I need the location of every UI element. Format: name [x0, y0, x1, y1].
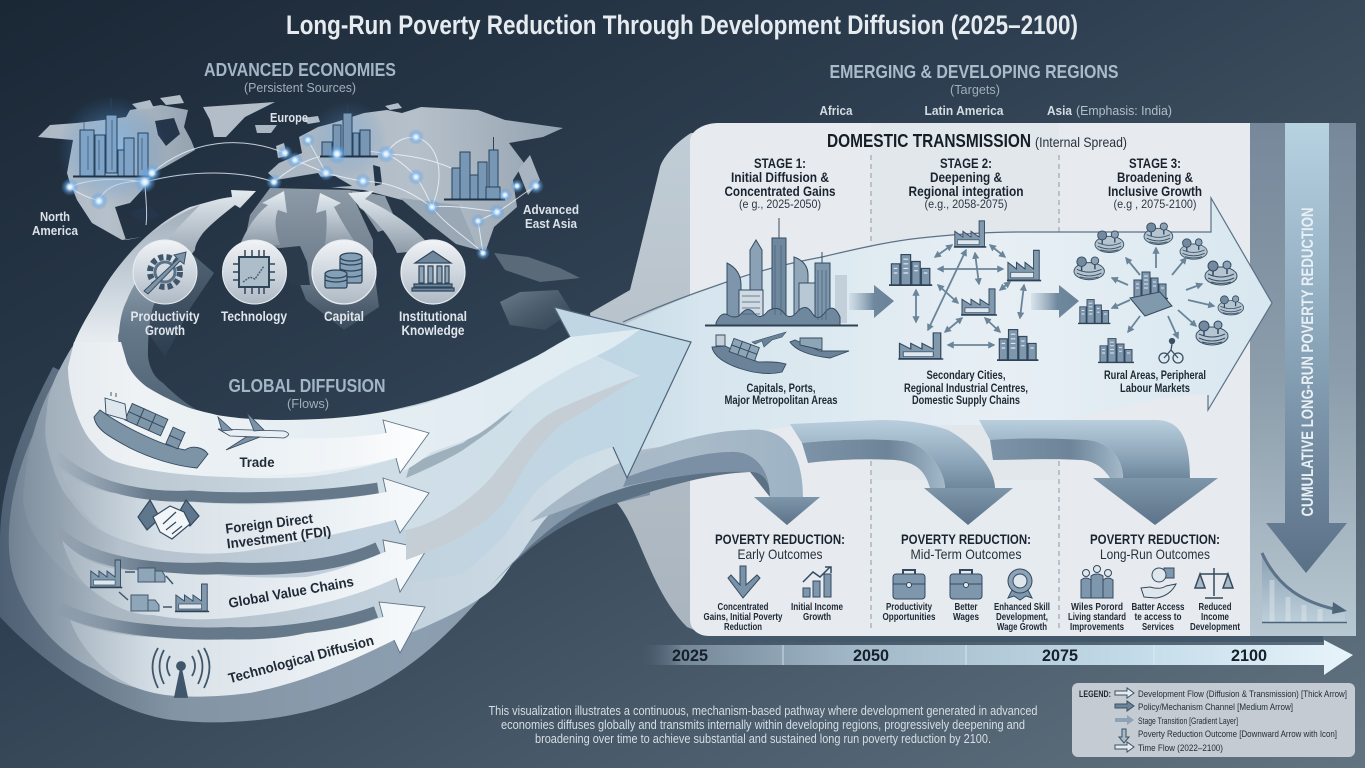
mid-term labels: [882, 601, 1050, 633]
early labels: Gains, Initial Poverty: [704, 611, 783, 623]
legend entries: Time Flow (2022–2100): [1138, 743, 1223, 754]
stage 3 heading: Inclusive Growth: [1108, 183, 1202, 199]
city skyline: [705, 218, 858, 326]
cargo ship two: [790, 338, 849, 358]
region labels: America: [32, 223, 79, 238]
legend symbols: [1115, 688, 1134, 752]
world map: [21, 95, 580, 357]
bicycle: [1159, 338, 1183, 363]
plane: [752, 332, 786, 347]
cargo ship one: [712, 335, 786, 373]
factory right: [1007, 250, 1041, 281]
central cluster: [1130, 272, 1172, 316]
legend entries: Stage Transition [Gradient Layer]: [1138, 716, 1238, 727]
mechanism labels: Knowledge: [402, 322, 465, 338]
legend: [1072, 683, 1355, 757]
mechanism labels: Capital: [324, 308, 364, 324]
value chains sheet and main arrowhead base: [23, 307, 691, 619]
target regions: (Emphasis: India): [1076, 103, 1172, 118]
long-run labels: Improvements: [1070, 621, 1124, 633]
legend entries: Policy/Mechanism Channel [Medium Arrow]: [1138, 702, 1293, 713]
farm north east: [1180, 239, 1207, 259]
upward arrows into map: [240, 191, 433, 253]
heading: advanced economies: ADVANCED ECONOMIES: [204, 60, 396, 80]
stage captions: Major Metropolitan Areas: [724, 393, 838, 407]
trade label: Trade: [240, 454, 275, 470]
timeline years: 2075: [1042, 646, 1078, 665]
skyline: east asia: [444, 137, 505, 200]
stage 2 heading: [908, 155, 1024, 211]
mechanism labels: Productivity: [130, 308, 200, 324]
heading: domestic transmission: DOMESTIC TRANSMISSION: [827, 131, 1031, 151]
heading: advanced economies: [204, 60, 396, 95]
stage captions: Domestic Supply Chains: [912, 393, 1020, 407]
value chains label: Global Value Chains: [227, 573, 355, 611]
description text: economies diffuses globally and transmits internally within developing regions, progressively deepening and: [501, 717, 1025, 732]
farm north: [1144, 223, 1173, 244]
mechanism circles: [133, 240, 465, 304]
map water details: [128, 118, 382, 222]
icon: briefcase productivity: [893, 570, 925, 599]
outer band: [0, 367, 650, 722]
icon: access to services hand: [1141, 568, 1176, 598]
heading: global diffusion: (Flows): [287, 396, 329, 411]
long-run labels: Income: [1201, 611, 1229, 623]
stage 1 heading: Concentrated Gains: [724, 183, 836, 199]
icon: income growth chart: [803, 567, 831, 597]
mini poverty decline chart: [1262, 553, 1347, 622]
farm east: [1205, 261, 1237, 285]
icon: handshake: [138, 500, 199, 539]
poverty outcomes: mid-term: [882, 531, 1050, 633]
secondary city: [889, 255, 932, 285]
description text: This visualization illustrates a continuous, mechanism-based pathway where development generated in advanced: [488, 703, 1038, 718]
stage captions: [724, 368, 1206, 407]
farm south east: [1196, 321, 1228, 345]
foreign direct investment arrow: [60, 470, 429, 554]
poverty outcomes: early: Early Outcomes: [738, 546, 822, 562]
region labels: Advanced: [523, 202, 579, 217]
fdi label: Foreign Direct: [224, 510, 314, 537]
long-run labels: te access to: [1134, 611, 1182, 623]
heading: global diffusion: [228, 376, 386, 411]
factory hub top: [954, 221, 986, 247]
icon: scales: [1195, 568, 1233, 598]
region labels: [32, 110, 579, 238]
stage captions: Secondary Cities,: [926, 368, 1006, 382]
icon: concentrated gains arrows: [728, 566, 760, 598]
skyline: north america: [73, 98, 153, 176]
capital icon: [312, 240, 376, 304]
long-run labels: Living standard: [1068, 611, 1126, 623]
trade arrow: [94, 392, 429, 476]
poverty outcomes: long-run: POVERTY REDUCTION:: [1090, 531, 1220, 547]
long-run labels: Development: [1190, 621, 1240, 633]
village south west: [1098, 339, 1134, 362]
icon: people: [1081, 566, 1113, 598]
main arrowhead outline: [554, 307, 691, 478]
long-run labels: Reduced: [1198, 601, 1232, 613]
mechanism labels: Growth: [145, 322, 185, 338]
stage captions: Regional Industrial Centres,: [904, 381, 1028, 395]
stage captions: Labour Markets: [1120, 381, 1190, 395]
value chain dark strip: [55, 530, 378, 569]
warm grey mid band: [406, 376, 640, 560]
poverty down arrow 1: [487, 430, 820, 590]
arrow outline: [623, 198, 1272, 410]
mid-term labels: Productivity: [886, 601, 932, 613]
fdi dark strip: [55, 455, 378, 498]
stage 1 heading: [724, 155, 836, 211]
legend: LEGEND:: [1079, 689, 1111, 700]
legend entries: [1138, 689, 1347, 754]
mid-term labels: Enhanced Skill: [994, 601, 1050, 613]
poverty down arrow 3: [979, 420, 1218, 525]
target regions: Asia: [1047, 103, 1073, 118]
stage transition arrow 2: [1031, 285, 1079, 318]
technology dark strip: [60, 608, 376, 633]
stage 1 illustration: metropolis and ports: [705, 218, 858, 373]
early labels: Reduction: [724, 621, 762, 633]
region labels: North: [40, 209, 70, 224]
heading: global diffusion: GLOBAL DIFFUSION: [228, 376, 386, 396]
fdi label: [224, 508, 332, 552]
fdi label: Investment (FDI): [226, 523, 332, 552]
right cumulative column: [1250, 123, 1356, 636]
long-run labels: Batter Access: [1132, 601, 1185, 613]
title: Long-Run Poverty Reduction Through Development Diffusion (2025–2100): [286, 10, 1078, 40]
poverty outcomes: long-run: Long-Run Outcomes: [1100, 546, 1210, 562]
heading: domestic transmission: (Internal Spread): [1035, 134, 1127, 150]
target regions: Latin America: [924, 103, 1004, 118]
poverty outcomes: mid-term: POVERTY REDUCTION:: [901, 531, 1031, 547]
target regions: Africa: [820, 103, 853, 118]
fdi sheet: [45, 345, 640, 554]
radial arrows: [1112, 248, 1214, 338]
icon: supply chain: [90, 560, 209, 612]
stage 2 network illustration: [889, 221, 1041, 360]
trade sheet and main flow: [68, 329, 640, 478]
network arrows: [916, 245, 1024, 345]
technological diffusion sheet: [9, 370, 640, 695]
early labels: Concentrated: [718, 601, 768, 613]
domestic transmission big arrow: [600, 198, 1272, 450]
poverty outcomes: long-run: [1068, 531, 1240, 633]
farm north west: [1095, 231, 1124, 252]
stage 3 heading: Broadening &: [1117, 169, 1193, 185]
timeline arrow: [640, 636, 1353, 675]
mid-term labels: Wages: [953, 611, 979, 623]
heading: emerging and developing regions: EMERGING & DEVELOPING REGIONS: [830, 62, 1118, 82]
stage 3 heading: (e.g , 2075-2100): [1114, 197, 1197, 211]
stage 1 heading: STAGE 1:: [754, 155, 806, 171]
timeline years: 2050: [853, 646, 889, 665]
grey wedge under top band: [406, 410, 513, 478]
panel wing: [590, 133, 720, 636]
icon: container ship: [94, 392, 208, 468]
long-run labels: Services: [1142, 621, 1174, 633]
glowing hub dots: [61, 129, 544, 260]
technological diffusion arrow: [70, 602, 425, 697]
timeline years: [672, 646, 1267, 665]
mechanism labels: [130, 308, 467, 338]
long-run labels: [1068, 601, 1240, 633]
stage 2 heading: Deepening &: [930, 169, 1002, 185]
early labels: [704, 601, 843, 633]
productivity growth icon: [133, 240, 197, 304]
heading: emerging and developing regions: [830, 62, 1118, 97]
mid-term labels: Development,: [996, 611, 1048, 623]
stage 3 heading: STAGE 3:: [1129, 155, 1181, 171]
cumulative label: CUMULATIVE LONG-RUN POVERTY REDUCTION: [1298, 208, 1317, 516]
factory bottom left: [898, 333, 943, 359]
description text: broadening over time to achieve substantial and sustained long run poverty reduction by 2100.: [535, 731, 991, 746]
stage 2 heading: Regional integration: [908, 183, 1024, 199]
hub bottom right: [997, 330, 1038, 360]
institutional knowledge icon: [401, 240, 465, 304]
map island details: [132, 95, 402, 158]
skyline: europe: [320, 105, 378, 156]
long-run labels: Wiles Porord: [1071, 601, 1123, 613]
stage captions: Rural Areas, Peripheral: [1104, 368, 1206, 382]
mid-term labels: Wage Growth: [997, 621, 1047, 633]
stage transition arrow 1: [849, 285, 894, 318]
stage 1 heading: (e g., 2025-2050): [739, 197, 821, 211]
early labels: Growth: [803, 611, 831, 623]
icon: radio tower: [152, 648, 210, 697]
farm west: [1074, 257, 1104, 280]
swirl arrow to map: [68, 190, 256, 420]
target regions: [820, 103, 1172, 118]
region labels: Europe: [270, 110, 308, 125]
heading: emerging and developing regions: (Targets): [950, 82, 1000, 97]
mechanism labels: Institutional: [399, 308, 467, 324]
farm far east: [1218, 296, 1244, 315]
diffusion flow bands: [0, 307, 820, 722]
stage 2 heading: (e.g., 2058-2075): [924, 197, 1008, 211]
timeline years: 2025: [672, 646, 708, 665]
panel: domestic transmission: [690, 123, 1250, 636]
mid-term labels: Opportunities: [882, 611, 936, 623]
icon: airplane: [218, 413, 288, 450]
cumulative arrow: [1266, 123, 1347, 573]
poverty down arrow 2: [790, 420, 1013, 525]
factory centre: [961, 289, 997, 315]
poverty outcomes: mid-term: Mid-Term Outcomes: [910, 546, 1022, 562]
icon: skill badge: [1008, 569, 1032, 600]
technology icon: [222, 240, 286, 304]
description text: [488, 703, 1038, 746]
mechanism labels: Technology: [221, 308, 287, 324]
poverty outcomes: early: POVERTY REDUCTION:: [715, 531, 845, 547]
glow halos: [57, 95, 167, 205]
early labels: Initial Income: [791, 601, 843, 613]
poverty outcomes: early: [704, 531, 845, 633]
stage 3 heading: [1108, 155, 1202, 211]
stage 3 radial illustration: [1074, 223, 1244, 363]
network lines: [70, 137, 536, 253]
stage captions: Capitals, Ports,: [746, 381, 816, 395]
village west: [1078, 300, 1110, 323]
mid-term labels: Better: [954, 601, 978, 613]
stage 2 heading: STAGE 2:: [940, 155, 992, 171]
global value chains arrow: [62, 540, 427, 619]
region labels: East Asia: [525, 216, 578, 231]
stage 1 heading: Initial Diffusion &: [731, 169, 829, 185]
technology label: Technological Diffusion: [226, 632, 376, 686]
heading: advanced economies: (Persistent Sources): [244, 80, 356, 95]
swirl highlight band: [68, 205, 200, 367]
timeline years: 2100: [1231, 646, 1267, 665]
icon: briefcase wages: [950, 570, 982, 599]
